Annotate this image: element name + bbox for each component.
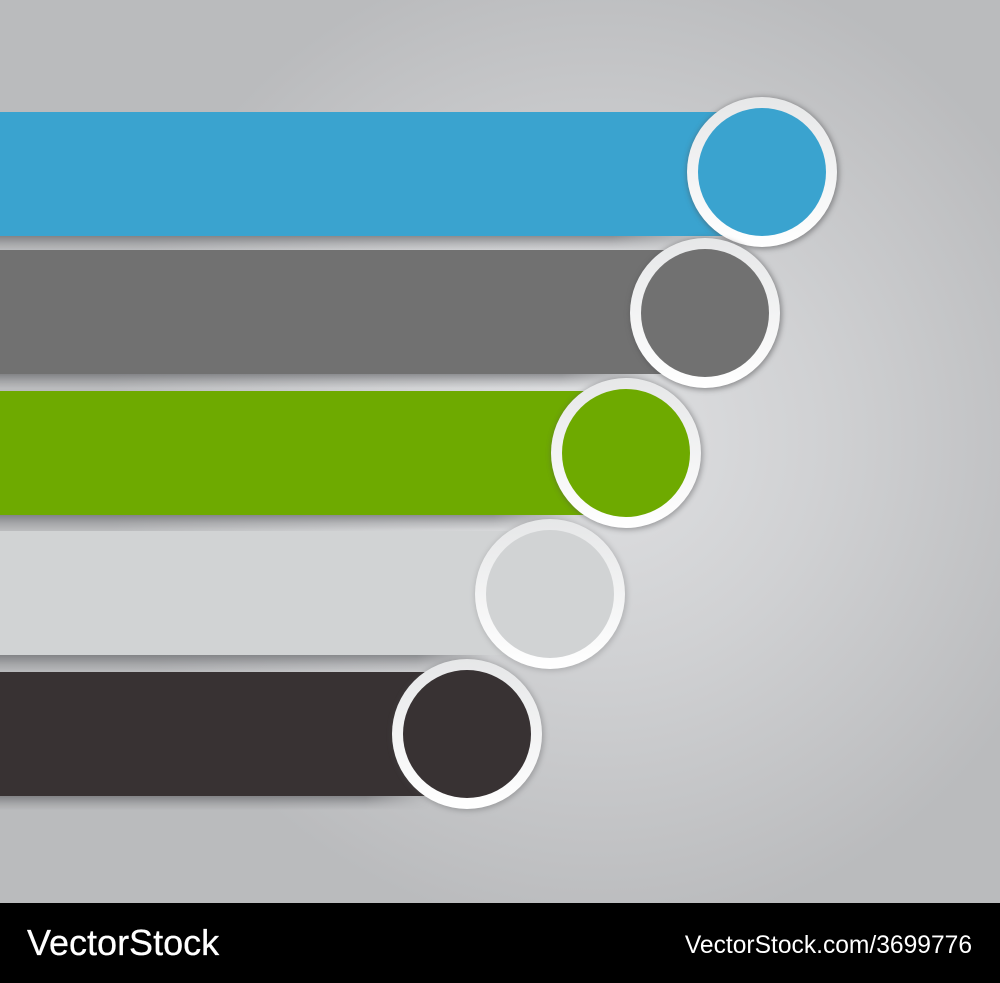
- watermark footer: [0, 903, 1000, 983]
- bar: blue: [0, 97, 839, 249]
- circle: green: [551, 378, 703, 530]
- circle: blue: [687, 97, 839, 249]
- circle: dark: [392, 659, 544, 811]
- circle: light grey: [475, 519, 627, 671]
- brand name: VectorStock: [27, 922, 219, 963]
- bar: light grey: [0, 519, 627, 671]
- bar shadows: [0, 236, 720, 810]
- circle: grey: [630, 238, 782, 390]
- bar: green: [0, 378, 703, 530]
- image id: VectorStock.com/3699776: [685, 932, 972, 959]
- bar: grey: [0, 238, 782, 390]
- bar: dark: [0, 659, 544, 811]
